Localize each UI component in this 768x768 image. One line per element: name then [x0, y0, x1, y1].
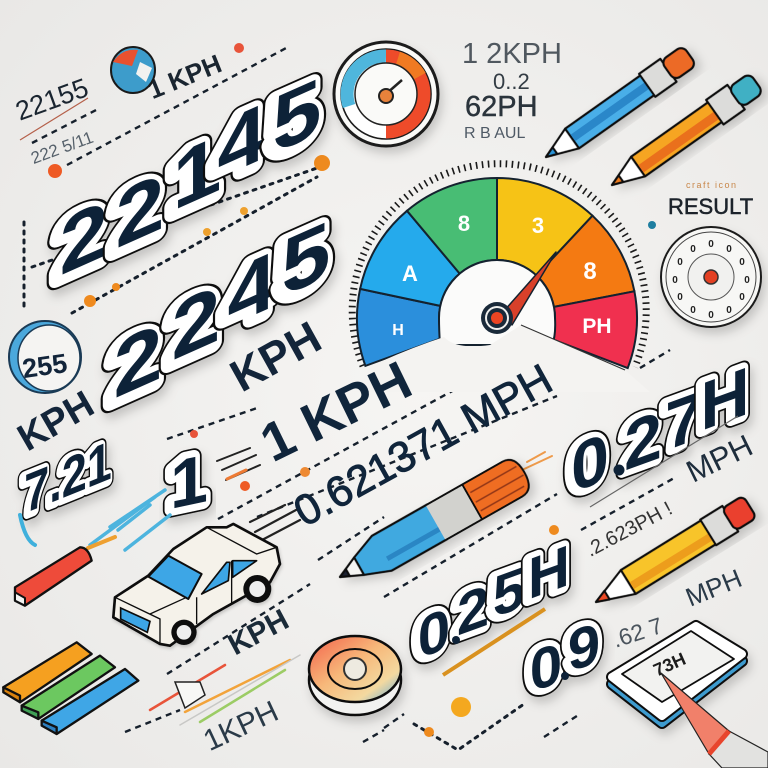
segment yellow	[497, 178, 592, 276]
3D number row: 22145: 2	[55, 186, 104, 297]
3D number row: 22145	[55, 60, 321, 297]
3D number: 0.25H: 2	[457, 572, 489, 648]
3D number row: 2245: 2	[114, 305, 162, 416]
3D number: 0.25H: 5	[493, 554, 525, 630]
small hand icon	[175, 682, 205, 708]
3D number: 0.9: 9	[566, 612, 598, 684]
large MPH text: 0.621371 MPH	[286, 355, 560, 536]
3D number: 0.27H: 0	[568, 418, 606, 509]
wheels	[171, 620, 197, 645]
dial: right side: 0	[739, 257, 745, 268]
icon: coin 255	[9, 321, 81, 393]
large KPH text: 1 KPH	[251, 350, 421, 474]
3D number: 0.27H: 2	[621, 396, 659, 487]
3D number: 7.21: 7.21	[22, 430, 109, 527]
3D number: 0.25H: H	[528, 532, 570, 612]
MPH lower right: MPH	[681, 563, 746, 612]
top center text block: R B AUL	[464, 125, 525, 142]
3D number: 0.9: 9	[568, 612, 600, 684]
3D number row: 22145: 5	[268, 64, 317, 175]
3D number row: 22145: 5	[273, 60, 321, 171]
speed lines	[20, 448, 552, 725]
result label	[668, 180, 753, 219]
bar blue	[42, 669, 138, 734]
3D number row: 2245: 2	[167, 271, 216, 382]
dashed guide lines	[24, 47, 676, 750]
segment labels: A	[402, 261, 418, 286]
dial: right side: 0	[739, 292, 745, 303]
3D number: 0.27H: 7	[662, 376, 700, 467]
3D number: 0.25H: 2	[454, 573, 486, 650]
colour disc	[309, 636, 401, 715]
3D number: 1: 1	[168, 440, 205, 524]
3D number row: 22145: 4	[213, 89, 262, 200]
3D number row: 2245: 4	[223, 237, 272, 348]
icon: top-left speedometer knob	[111, 47, 155, 93]
segment labels: 8	[458, 211, 470, 236]
3D number: 0.25H: H	[525, 533, 567, 613]
top center text block: 1 2KPH	[462, 38, 562, 70]
car	[113, 524, 280, 646]
3D number row: 22145: 2	[55, 186, 104, 297]
3D number row: 22145: 4	[213, 89, 262, 200]
segment labels: H	[392, 322, 404, 339]
segment red	[551, 291, 637, 368]
side windows	[202, 562, 230, 594]
small top-left labels: 222 5/11	[28, 128, 96, 168]
segment labels: 8	[583, 258, 597, 285]
bar orange	[3, 642, 92, 702]
3D number: 7.21: 7.21	[22, 430, 109, 527]
dial: right side: 0	[672, 275, 678, 286]
small 0.623PH text: .2.623PH !	[582, 498, 676, 562]
main speedometer gauge	[352, 164, 650, 392]
3D number: 0.25H: 0	[415, 596, 447, 673]
3D number row: 2245: 4	[223, 237, 272, 348]
3D number: 0.25H: H	[525, 533, 567, 613]
dial: right side: 0	[677, 292, 683, 303]
3D number row: 22145: 2	[116, 155, 164, 266]
small .62 7 text: .62 7	[609, 612, 666, 653]
torn paper	[355, 325, 650, 392]
3D number: 0.27H: 2	[624, 395, 662, 485]
3D number row: 22145: 2	[111, 159, 160, 270]
3D number: 0.27H	[568, 351, 750, 509]
3D number row: 2245: 2	[109, 309, 158, 420]
segment labels: PH	[582, 315, 612, 338]
3D number: 1: 1	[168, 440, 205, 524]
needle	[503, 252, 556, 325]
3D number: 0.9: 0	[530, 632, 562, 704]
tablet	[612, 626, 742, 723]
segment cyan	[360, 211, 460, 306]
3D number row: 22145: 5	[268, 64, 317, 175]
3D number: 0.25H	[415, 532, 570, 673]
icon: coin 255: 255	[20, 348, 69, 384]
3D number: 0.27H: 7	[665, 375, 703, 465]
marker: red eraser	[15, 547, 92, 606]
small gauge top	[334, 42, 438, 146]
3D number: 0.27H: 2	[621, 396, 659, 487]
small top-left labels: 22155	[12, 73, 92, 126]
3D number row: 22145: 1	[168, 121, 217, 232]
top center text block	[462, 38, 562, 142]
3D number: 0.9	[528, 612, 600, 704]
3D number: 0.27H: H	[697, 352, 747, 447]
dial: right side: 0	[744, 275, 750, 286]
3D number row: 2245: 2	[109, 309, 158, 420]
dial: right side: 0	[708, 239, 714, 250]
1KPH lower text: 1KPH	[198, 695, 283, 758]
dial: right side: 0	[708, 310, 714, 321]
3D number: 0.9: 9	[566, 612, 598, 684]
3D number row: 22145: 1	[173, 117, 221, 228]
segment green	[407, 178, 497, 274]
3D number row: 2245: 5	[277, 207, 326, 318]
small top-left labels	[11, 48, 329, 460]
3D number row: 2245: 4	[228, 233, 276, 344]
3D number row: 2245: 5	[282, 203, 330, 314]
3D number: 0.25H: 0	[415, 596, 447, 673]
3D number: 0.9: 0	[528, 632, 560, 704]
top center text block: 62PH	[465, 91, 538, 123]
orange splashes	[48, 43, 656, 737]
3D number row: 22145: 2	[111, 159, 160, 270]
3D number row: 22145: 2	[60, 182, 108, 293]
3D number: 0.25H: 5	[490, 555, 522, 632]
dial: right side: 0	[726, 244, 732, 255]
hub	[481, 302, 513, 334]
3D number: 0.27H: 0	[568, 418, 606, 509]
pencil: yellow	[588, 494, 758, 615]
3D number: 0.27H: H	[700, 351, 750, 445]
gauge center	[439, 260, 555, 345]
3D number: 0.25H: 5	[490, 555, 522, 632]
MPH upper right: MPH	[681, 428, 758, 489]
striped bars	[3, 642, 138, 734]
3D number row: 2245	[109, 203, 330, 420]
segment labels: 3	[532, 213, 544, 238]
windshield	[148, 556, 202, 599]
segment blue	[357, 289, 442, 366]
3D number: 0.25H: 0	[418, 595, 450, 671]
3D number row: 22145: 4	[218, 85, 266, 196]
result label: craft icon	[686, 180, 736, 190]
3D number row: 22145: 1	[168, 121, 217, 232]
dial: right side: 0	[677, 257, 683, 268]
small top-left labels: KPH	[222, 311, 329, 402]
gauge ticks	[352, 164, 646, 367]
3D number row: 2245: 2	[167, 271, 216, 382]
3D number row: 2245: 5	[277, 207, 326, 318]
3D number: 0.27H: 0	[571, 417, 609, 507]
small top-left labels: 1 KPH	[144, 48, 226, 105]
3D number: 0.9: 0	[528, 632, 560, 704]
dial: right side: 0	[690, 305, 696, 316]
segment orange	[537, 216, 634, 307]
3D number: 7.21: 7.21	[24, 428, 112, 525]
pencil: blue	[538, 44, 698, 168]
pencil: orange	[603, 70, 765, 197]
KPH lower text: KPH	[223, 603, 294, 662]
marker: blue orange	[330, 455, 534, 594]
grille	[121, 608, 150, 632]
3D number: 0.25H: 2	[454, 573, 486, 650]
dial: right side	[661, 227, 761, 327]
result label: RESULT	[668, 194, 753, 219]
stylus	[661, 673, 768, 768]
3D number row: 2245: 2	[172, 267, 220, 378]
3D number: 0.27H: H	[697, 352, 747, 447]
dial: right side: 0	[690, 244, 696, 255]
small top-left labels: KPH	[11, 383, 101, 460]
bar green	[22, 656, 115, 719]
3D number: 1: 1	[170, 440, 208, 524]
tablet: 73H	[650, 649, 689, 680]
top center text block: 0..2	[493, 69, 530, 94]
3D number: 0.27H: 7	[662, 376, 700, 467]
segment labels	[392, 211, 612, 339]
dial: right side: 0	[726, 305, 732, 316]
